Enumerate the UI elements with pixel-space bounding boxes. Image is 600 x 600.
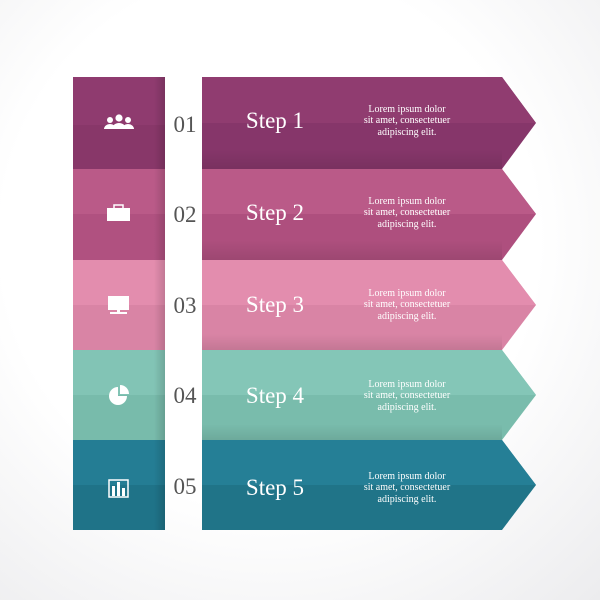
icon: people [104, 114, 134, 129]
step titles: Step 3 [246, 292, 304, 317]
descriptions: adipiscing elit. [378, 219, 436, 230]
descriptions: adipiscing elit. [378, 402, 436, 413]
descriptions: adipiscing elit. [378, 311, 436, 322]
row 3 [73, 260, 536, 350]
arrow 4 [202, 350, 536, 440]
tab 2 [73, 169, 165, 260]
icon: bar chart [109, 480, 128, 497]
descriptions: Lorem ipsum dolor [368, 379, 446, 390]
icon: briefcase [107, 205, 130, 221]
tab 3 [73, 260, 165, 350]
numbers: 02 [174, 202, 196, 227]
tab 1 [73, 77, 165, 169]
step titles: Step 2 [246, 200, 304, 225]
descriptions: sit amet, consectetuer [364, 207, 451, 218]
icon: monitor [108, 296, 129, 314]
arrow 2 [202, 169, 536, 260]
descriptions: adipiscing elit. [378, 494, 436, 505]
descriptions [364, 104, 451, 505]
tab 5 [73, 440, 165, 530]
row 2 [73, 169, 536, 260]
row 1 [73, 77, 536, 169]
icon: pie chart [109, 385, 129, 405]
numbers: 05 [174, 474, 196, 499]
descriptions: adipiscing elit. [378, 127, 436, 138]
descriptions: sit amet, consectetuer [364, 482, 451, 493]
descriptions: sit amet, consectetuer [364, 299, 451, 310]
step titles: Step 5 [246, 475, 304, 500]
descriptions: Lorem ipsum dolor [368, 471, 446, 482]
numbers: 03 [174, 293, 196, 318]
step titles [246, 108, 305, 500]
arrow 1 [202, 77, 536, 169]
tab 4 [73, 350, 165, 440]
descriptions: Lorem ipsum dolor [368, 196, 446, 207]
descriptions: sit amet, consectetuer [364, 115, 451, 126]
descriptions: Lorem ipsum dolor [368, 104, 446, 115]
row 4 [73, 350, 536, 440]
numbers: 04 [174, 383, 197, 408]
descriptions: sit amet, consectetuer [364, 390, 451, 401]
numbers: 01 [174, 112, 196, 137]
step titles: Step 1 [246, 108, 304, 133]
arrow 5 [202, 440, 536, 530]
numbers [174, 112, 197, 499]
descriptions: Lorem ipsum dolor [368, 288, 446, 299]
step titles: Step 4 [246, 383, 305, 408]
row 5 [73, 440, 536, 530]
arrow 3 [202, 260, 536, 350]
